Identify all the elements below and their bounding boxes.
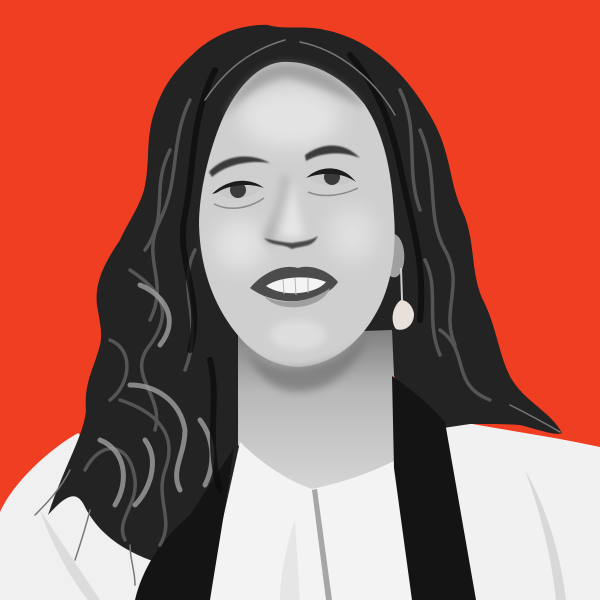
neck (238, 330, 398, 505)
cheek highlight right (328, 207, 376, 263)
cheek highlight left (214, 219, 266, 271)
mouth (250, 267, 338, 307)
hair back mass (48, 25, 562, 563)
white jacket (0, 418, 600, 600)
eyebrows (209, 146, 360, 177)
hair strands (35, 40, 560, 585)
eyes (212, 168, 358, 208)
chin highlight (270, 320, 326, 350)
hairline shade (222, 62, 366, 120)
face (199, 62, 395, 392)
shade under jaw (246, 335, 368, 392)
black lapels (135, 376, 476, 600)
earring (393, 268, 414, 330)
blouse (205, 442, 412, 600)
ear (390, 234, 404, 277)
forehead highlight (240, 88, 340, 148)
nose (264, 175, 318, 249)
